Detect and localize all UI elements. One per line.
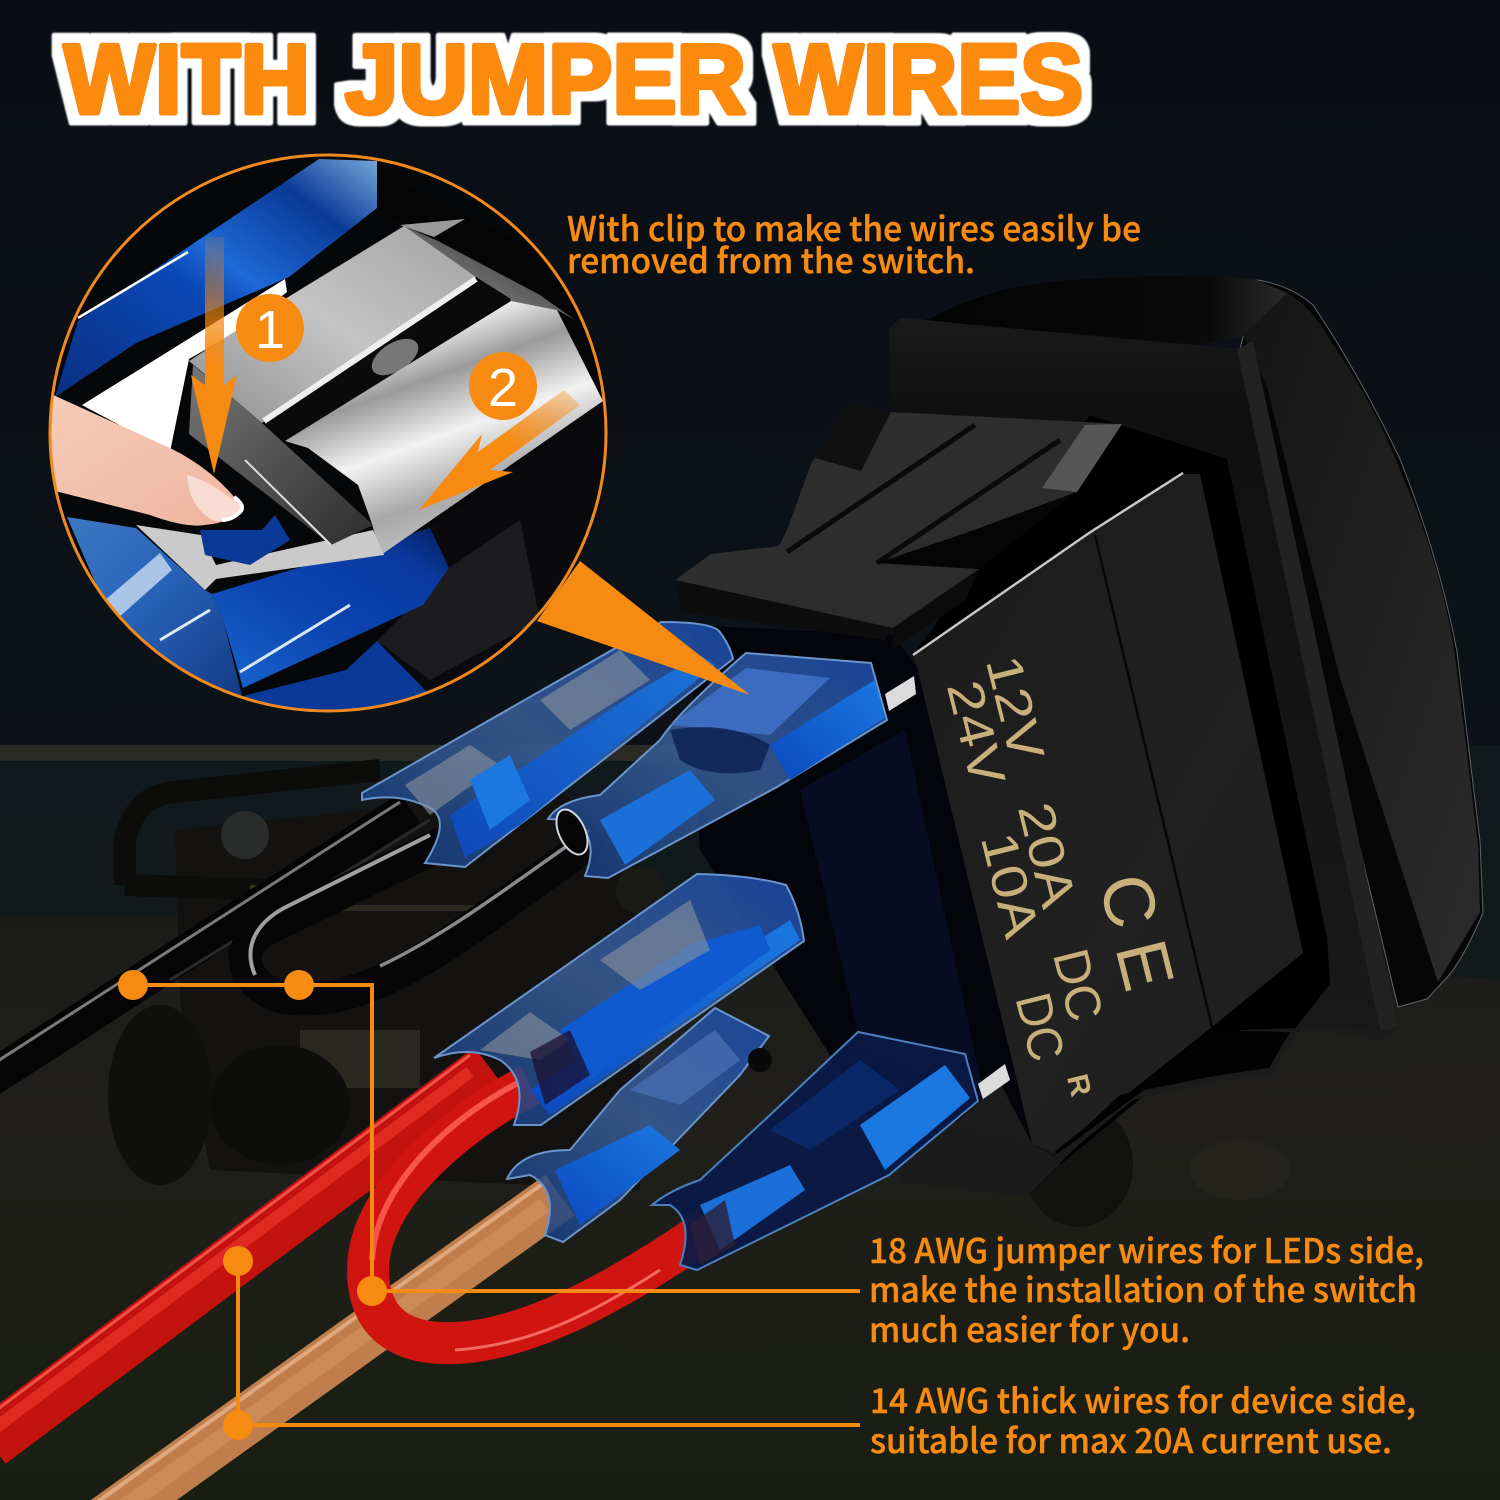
- terminal 2: [548, 653, 887, 878]
- gray terminal wall: [950, 1083, 1032, 1143]
- tan wire: [40, 1180, 560, 1500]
- blue terminals: [362, 622, 978, 1270]
- black lower gap: [1053, 1030, 1290, 1157]
- callout leader: thick wires: [223, 1246, 860, 1440]
- clip latch: [675, 402, 1122, 650]
- navy glow in rear body: [800, 730, 985, 1100]
- upper blue tube: [55, 159, 377, 397]
- rivet: [372, 338, 418, 376]
- clip caption: [567, 202, 1141, 283]
- jumper wire caption: [869, 1224, 1424, 1352]
- lens border: [50, 155, 606, 711]
- badge 2: [469, 352, 537, 420]
- callout leader: jumper wires: [118, 970, 860, 1306]
- title: [64, 24, 1083, 134]
- rocker switch body: [675, 276, 1483, 1197]
- rating text: CE: [1083, 866, 1189, 998]
- clip caption: removed from the switch.: [567, 234, 975, 283]
- jumper wire caption: 18 AWG jumper wires for LEDs side,: [869, 1224, 1424, 1273]
- bottom blue bits: [243, 641, 426, 710]
- rating text: DC: [1042, 943, 1114, 1027]
- fingernail: [187, 475, 243, 521]
- rating text: DC: [1005, 987, 1075, 1067]
- rating text: 20A: [1007, 797, 1087, 914]
- thick wire caption: [870, 1374, 1416, 1463]
- arrow 1: [191, 237, 237, 474]
- rocker face: [1243, 293, 1480, 982]
- badge 2: 2: [488, 358, 518, 418]
- thick wire caption: suitable for max 20A current use.: [870, 1414, 1392, 1463]
- lower plate: [285, 301, 603, 555]
- title: JUMPER: [345, 24, 746, 134]
- red main wire: [0, 1055, 490, 1443]
- jumper wire caption: much easier for you.: [869, 1303, 1190, 1352]
- tab edge: [245, 460, 331, 545]
- jumper wire caption: make the installation of the switch: [869, 1263, 1417, 1312]
- truck silhouette: [108, 770, 1290, 1227]
- rating text: R: [1060, 1071, 1097, 1100]
- label face: [913, 474, 1303, 1153]
- upper plate shadow: [404, 226, 575, 320]
- tube highlight: [78, 252, 188, 318]
- badge 1: 1: [255, 300, 285, 360]
- plate slot: [262, 277, 511, 423]
- face seam: [1095, 535, 1212, 1027]
- dark switch interior: [380, 401, 620, 740]
- finger: [40, 394, 243, 526]
- terminal 5: [652, 1032, 978, 1270]
- white glare: [82, 279, 287, 452]
- terminal 4: [507, 1008, 772, 1242]
- black jumper loop: [245, 830, 600, 999]
- rating text: 24V: [936, 675, 1016, 792]
- thick wire caption: 14 AWG thick wires for device side,: [870, 1374, 1416, 1423]
- flange plate: [889, 318, 1382, 1038]
- rating text: [936, 650, 1189, 1100]
- black main wire: [0, 802, 430, 1079]
- latch tab: [189, 365, 373, 545]
- metal prongs: [885, 676, 1010, 1099]
- rocker dome: [900, 276, 1287, 345]
- lower strap: [136, 525, 384, 590]
- lower blue tube: [212, 528, 449, 688]
- terminal 3: [434, 874, 804, 1125]
- rating text: 10A: [970, 827, 1050, 944]
- blue latch: [200, 515, 290, 565]
- upper plate: [189, 226, 476, 423]
- lower left clear sleeve: [67, 517, 243, 700]
- rear body: [690, 625, 1032, 1197]
- red jumper loop: [368, 1082, 710, 1350]
- gap around face: [913, 415, 1330, 1165]
- flange strip: [1237, 341, 1398, 1038]
- ridge highlight: [913, 473, 1183, 655]
- orange pointer wedge: [537, 561, 750, 695]
- rating text: 12V: [975, 650, 1055, 767]
- arrow 2: [419, 390, 580, 510]
- tube streaks: [160, 605, 350, 672]
- badge 1: [236, 294, 304, 362]
- clip caption: With clip to make the wires easily be: [567, 202, 1141, 251]
- terminal 1: [362, 622, 733, 867]
- plate notch: [400, 219, 465, 237]
- title: WITH: [64, 24, 310, 134]
- rocker cap: [1240, 280, 1483, 1007]
- sleeve streak: [105, 553, 172, 618]
- title: WIRES: [774, 24, 1083, 134]
- nail tip: [222, 497, 242, 520]
- wires: [0, 802, 710, 1500]
- lower lip: [900, 1027, 1401, 1197]
- slot bright strip: [264, 279, 476, 421]
- magnifier inset: [48, 154, 608, 712]
